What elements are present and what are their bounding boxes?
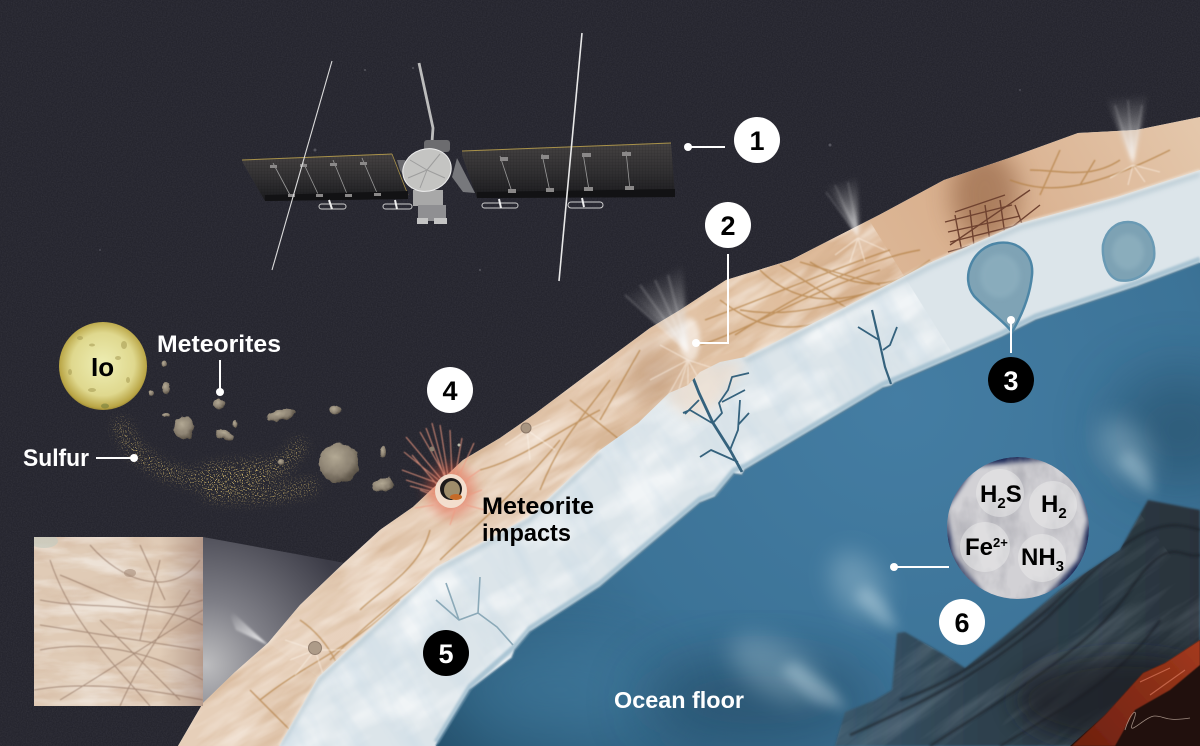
small rocks <box>148 361 386 465</box>
callout 6 leader <box>890 563 949 571</box>
formula: H2: 2 <box>1058 505 1067 522</box>
callout 4 <box>427 367 473 413</box>
formula: Fe2+: 2+ <box>993 535 1008 550</box>
cracks: ice fractures <box>436 310 897 645</box>
right solar array <box>462 143 675 198</box>
antennas <box>272 61 332 270</box>
signature mark <box>1125 712 1190 730</box>
geyser plumes <box>226 83 1150 645</box>
formula: H2S: H <box>980 481 997 508</box>
hydrothermal vent plumes <box>719 410 1163 716</box>
label: Ocean floor: Ocean floor <box>614 687 744 713</box>
callout 2 <box>692 202 751 347</box>
callout 1 <box>684 117 780 163</box>
meteorite impact burst <box>402 423 485 525</box>
label: Meteorites: Meteorites <box>157 331 281 358</box>
callout 5: 5 <box>438 639 454 669</box>
formula: H2: H <box>1041 491 1058 518</box>
formula: H2S: 2 <box>997 495 1006 512</box>
callout 4: 4 <box>442 376 458 406</box>
label: Sulfur <box>23 445 138 472</box>
formula: NH3: NH <box>1021 544 1056 571</box>
chemistry bubble <box>947 457 1089 599</box>
label: Sulfur: Sulfur <box>23 445 89 472</box>
label: Io: Io <box>91 352 114 382</box>
surface lineae <box>250 150 1170 740</box>
lit zone of the zoom wedge on crust <box>268 563 405 677</box>
lava <box>1070 640 1200 746</box>
label: Meteorite impacts: Meteorite <box>482 493 594 520</box>
callout 5 <box>423 630 469 676</box>
ice shell <box>178 117 1200 746</box>
zoom wedge <box>203 537 345 703</box>
callout 3: 3 <box>1003 366 1019 396</box>
vent fans <box>285 165 1160 680</box>
ocean floor rock <box>835 500 1200 746</box>
ice edge shadow <box>436 259 1200 742</box>
surface crust <box>178 117 1200 746</box>
bus and boom <box>397 63 475 224</box>
label: Meteorite impacts <box>482 493 594 547</box>
crust rim highlight <box>279 170 1200 746</box>
io moon <box>59 322 147 410</box>
callout 6: 6 <box>954 608 970 638</box>
left solar array <box>242 154 408 201</box>
vent fan on ice <box>664 360 745 418</box>
formula: Fe2+: Fe <box>965 534 993 561</box>
label: Meteorite impacts: impacts <box>482 520 571 547</box>
sulfur dust stream <box>120 420 315 495</box>
callout 2: 2 <box>720 211 736 241</box>
water pockets <box>968 222 1154 332</box>
ocean <box>436 263 1200 746</box>
craters <box>308 423 531 654</box>
callout 1: 1 <box>749 126 765 156</box>
large rocks <box>174 407 395 493</box>
meteorites <box>148 361 395 493</box>
chaos terrain <box>944 190 1040 253</box>
inset: surface close-up <box>30 534 203 706</box>
callout 6 <box>939 599 985 645</box>
radiators <box>319 198 603 209</box>
callout 3 <box>988 316 1034 403</box>
spacecraft <box>242 33 675 281</box>
ice shadow below crust <box>279 174 1200 746</box>
label: Meteorites <box>157 331 281 396</box>
formula: NH3: 3 <box>1056 558 1064 575</box>
formula: H2S: S <box>1006 481 1022 508</box>
